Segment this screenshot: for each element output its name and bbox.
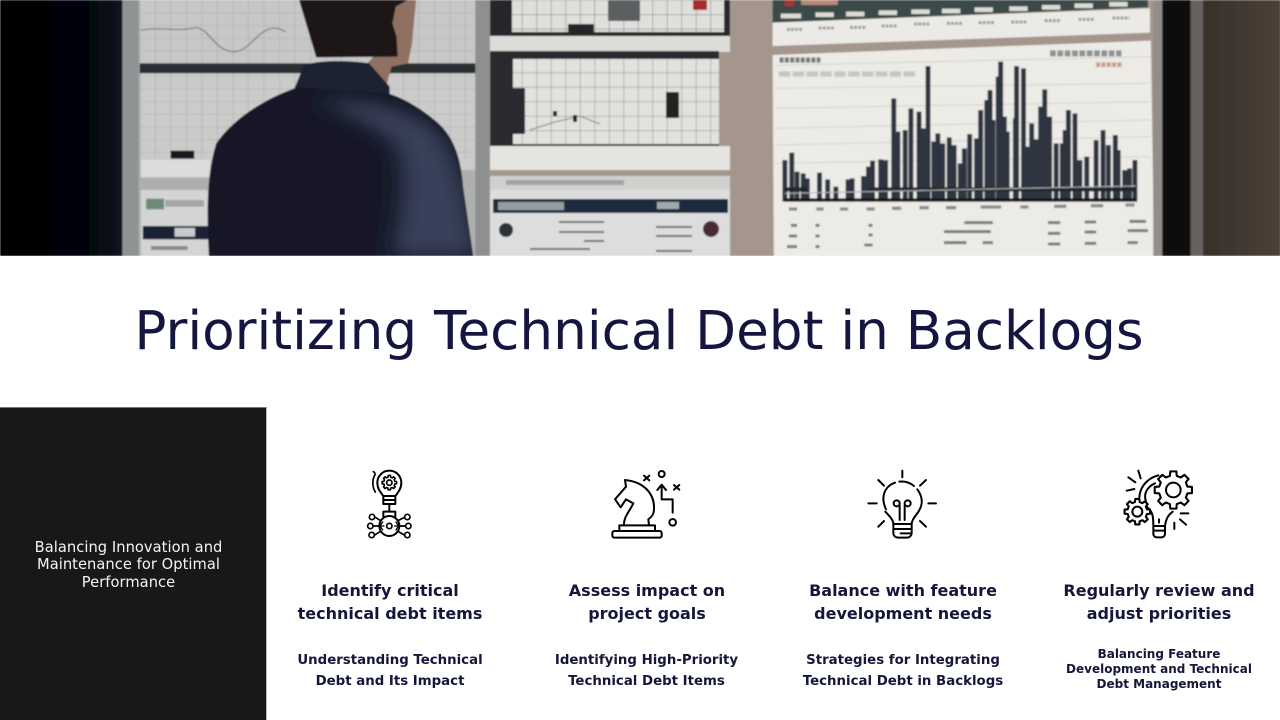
icon: lightbulb gear circuit <box>366 470 680 539</box>
chart panel <box>773 41 1154 256</box>
column 4 subtext: Balancing Feature <box>1098 647 1220 661</box>
left dark edge <box>0 0 122 256</box>
column 2 heading: project goals <box>588 604 706 623</box>
column 3 subtext: Strategies for Integrating <box>806 653 1000 668</box>
right frame and wall <box>1153 0 1163 256</box>
column 4 subtext <box>1066 647 1252 691</box>
column 3 subtext: Technical Debt in Backlogs <box>803 674 1003 689</box>
column 1 subtext: Debt and Its Impact <box>316 674 464 689</box>
column 1 subtext <box>297 653 483 689</box>
man: sweater <box>208 87 473 256</box>
column 4 heading: adjust priorities <box>1087 604 1231 623</box>
subtitle text <box>35 539 222 591</box>
column 4 subtext: Debt Management <box>1097 677 1221 691</box>
hero photo: analyst viewing dashboards <box>0 0 1280 256</box>
column 4 heading <box>1063 581 1255 623</box>
column 3 heading: development needs <box>814 604 992 623</box>
subtitle panel <box>0 407 267 720</box>
icon: head bulb with gears <box>1125 471 1192 537</box>
column 2 subtext: Technical Debt Items <box>568 674 725 689</box>
subtitle text: Maintenance for Optimal <box>37 556 220 573</box>
column 2 heading <box>568 581 725 623</box>
column 4 subtext: Development and Technical <box>1066 662 1252 676</box>
subtitle text: Performance <box>82 574 175 591</box>
title: Prioritizing Technical Debt in Backlogs <box>134 300 1144 362</box>
column 2 heading: Assess impact on <box>569 581 725 600</box>
man: hair <box>299 0 408 57</box>
column 1 heading <box>298 581 482 623</box>
icon: chess knight strategy <box>612 471 679 538</box>
icon: light bulb <box>867 470 1193 539</box>
column 2 subtext: Identifying High-Priority <box>555 653 738 668</box>
man: face and neck <box>367 0 416 83</box>
man: sweater highlight <box>318 99 477 256</box>
column 1 heading: Identify critical <box>321 581 459 600</box>
column 2 subtext <box>555 653 738 689</box>
column 1 heading: technical debt items <box>298 604 482 623</box>
top right dashboard <box>773 0 1148 23</box>
column 3 subtext <box>802 653 1003 689</box>
man: collar <box>294 61 390 100</box>
column 3 heading <box>809 581 997 623</box>
column 3 heading: Balance with feature <box>809 581 997 600</box>
subtitle text: Balancing Innovation and <box>35 539 222 556</box>
middle dashboard screen <box>490 0 730 256</box>
bar chart <box>785 62 1135 202</box>
column 4 heading: Regularly review and <box>1063 581 1255 600</box>
column 1 subtext: Understanding Technical <box>297 653 483 668</box>
